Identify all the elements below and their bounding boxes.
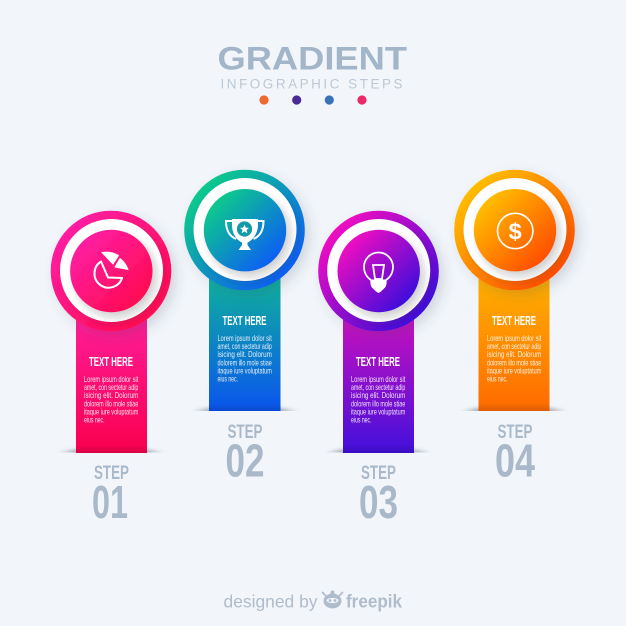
icon: light bulb: [364, 252, 393, 293]
ribbon body text: amet, con sectetur adip: [487, 341, 542, 351]
step number: 01: [92, 476, 128, 528]
step label: STEP: [498, 421, 532, 443]
ribbon body text: dolorem illo mole stiae: [351, 398, 406, 408]
icon: dollar coin: [498, 213, 533, 249]
ribbon body text: amet, con sectetur adip: [84, 382, 139, 392]
ribbon body text: dolorem illo mole stiae: [218, 357, 272, 367]
ribbon body text: [487, 333, 542, 384]
ribbon body text: isicing elit. Dolorum: [218, 349, 272, 359]
step number: 02: [226, 434, 264, 486]
ribbon body text: isicing elit. Dolorum: [84, 390, 138, 400]
icon: freepik mascot: [322, 590, 343, 608]
ribbon body text: itaque iure voluptatum: [351, 406, 405, 416]
step number: 03: [359, 476, 398, 528]
ribbon: [76, 310, 147, 453]
ribbon body text: itaque iure voluptatum: [487, 365, 541, 375]
panel: step 2: [184, 170, 305, 486]
floor shadow: [194, 406, 296, 411]
ribbon body text: [218, 333, 272, 384]
step label: STEP: [94, 462, 129, 484]
ribbon body text: dolorem illo mole stiae: [487, 357, 542, 367]
floor shadow: [463, 406, 566, 411]
ribbon: [209, 270, 280, 411]
ribbon body text: eius nec.: [218, 374, 238, 384]
decorative colour dots: [259, 95, 367, 105]
ribbon heading: TEXT HERE: [89, 355, 133, 369]
floor shadow: [326, 448, 429, 452]
panel: step 1: [51, 211, 171, 528]
credit text: designed by: [224, 592, 318, 612]
ribbon heading: TEXT HERE: [492, 314, 536, 328]
ribbon body text: [351, 374, 406, 424]
heading: gradient: GRADIENT: [218, 40, 408, 76]
title block: [218, 40, 408, 105]
medallion: [454, 170, 575, 290]
medallion: [184, 170, 305, 290]
ribbon body text: amet, con sectetur adip: [351, 382, 406, 392]
ribbon body text: amet, con sectetur adip: [218, 341, 272, 351]
ribbon body text: eius nec.: [84, 414, 104, 424]
ribbon body text: [84, 374, 139, 424]
ribbon body text: isicing elit. Dolorum: [351, 390, 405, 400]
ribbon body text: eius nec.: [487, 374, 508, 384]
panel: step 3: [318, 211, 439, 528]
subheading: INFOGRAPHIC STEPS: [220, 76, 402, 92]
step label: STEP: [228, 421, 262, 443]
ribbon body text: eius nec.: [351, 414, 372, 424]
ribbon heading: TEXT HERE: [222, 314, 266, 328]
icon: dollar coin: $: [509, 218, 522, 244]
ribbon: [343, 310, 414, 453]
icon: pie chart: [94, 252, 128, 288]
ribbon body text: Lorem ipsum dolor sit: [218, 333, 272, 343]
icon: trophy: [226, 219, 264, 250]
step label: STEP: [361, 462, 396, 484]
ribbon body text: itaque iure voluptatum: [218, 365, 272, 375]
brand name: freepik: [346, 592, 403, 612]
ribbon body text: dolorem illo mole stiae: [84, 398, 139, 408]
panel: step 4: [454, 170, 575, 486]
ribbon body text: isicing elit. Dolorum: [487, 349, 541, 359]
medallion: [318, 211, 439, 331]
medallion: [51, 211, 171, 331]
ribbon body text: Lorem ipsum dolor sit: [84, 374, 139, 384]
ribbon body text: Lorem ipsum dolor sit: [487, 333, 542, 343]
footer credit: [224, 590, 403, 612]
ribbon: [478, 270, 550, 411]
ribbon body text: itaque iure voluptatum: [84, 406, 138, 416]
step number: 04: [495, 434, 535, 486]
ribbon heading: TEXT HERE: [356, 355, 400, 369]
ribbon body text: Lorem ipsum dolor sit: [351, 374, 406, 384]
floor shadow: [60, 448, 162, 452]
